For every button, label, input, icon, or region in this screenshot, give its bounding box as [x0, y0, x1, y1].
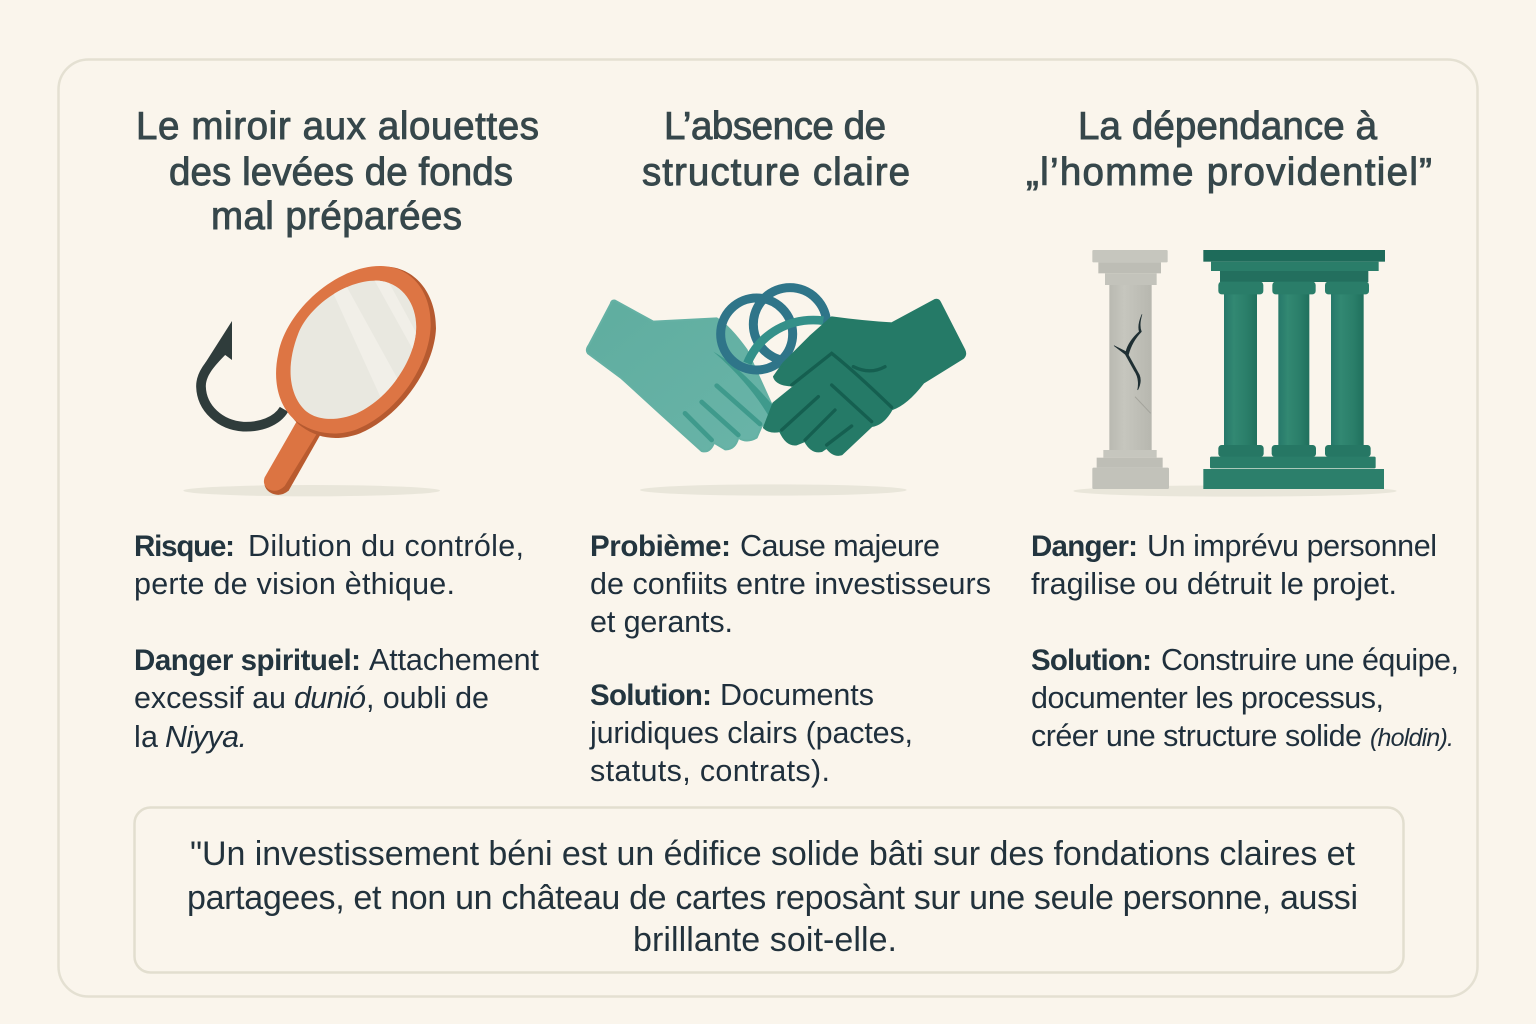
panel: absence de structure: [587, 105, 991, 788]
heading: miroir aux alouettes: [136, 105, 539, 238]
heading: miroir aux alouettes: mal préparées: [211, 195, 462, 238]
text: solution equipe: [1031, 643, 1459, 753]
text: danger spirituel: Attachement: [369, 643, 540, 677]
text: probleme: Probième:: [590, 530, 731, 563]
callout: quote: [134, 808, 1404, 972]
callout: quote: "Un investissement béni est un édifice solide bâti sur des fondations claires et: [190, 835, 1356, 873]
text: danger spirituel: Niyya.: [165, 720, 247, 754]
heading: absence de structure: structure claire: [642, 151, 910, 194]
text: danger spirituel: Danger spirituel:: [134, 644, 361, 677]
icon: cracked column and green temple: [1073, 250, 1397, 497]
text: solution documents: statuts, contrats).: [590, 754, 830, 788]
text: risque: Dilution du contróle,: [248, 529, 524, 563]
text: risque: [134, 529, 524, 601]
text: risque: perte de vision èthique.: [134, 567, 455, 601]
heading: homme providentiel: [1026, 105, 1432, 194]
heading: absence de structure: L’absence de: [664, 105, 886, 148]
text: danger spirituel: , oubli de: [366, 681, 489, 715]
green temple: [1203, 250, 1385, 489]
callout: quote: brilllante soit-elle.: [633, 921, 897, 959]
text: solution equipe: Solution:: [1031, 644, 1152, 677]
heading: absence de structure: [642, 105, 910, 194]
text: danger: [1031, 529, 1437, 601]
text: risque: Risque:: [134, 530, 235, 563]
heading: homme providentiel: La dépendance à: [1078, 105, 1378, 148]
text: solution documents: Documents: [720, 678, 874, 712]
text: solution documents: Solution:: [590, 679, 712, 712]
callout: quote: partagees, et non un château de cartes reposànt sur une seule personne, aussi: [187, 879, 1358, 917]
text: solution documents: juridiques clairs (pactes,: [589, 716, 913, 750]
text: solution equipe: Construire une équipe,: [1161, 643, 1459, 677]
text: danger spirituel: excessif au: [134, 681, 286, 715]
text: danger: fragilise ou détruit le projet.: [1031, 567, 1397, 601]
heading: miroir aux alouettes: des levées de fonds: [169, 151, 513, 194]
text: danger: Un imprévu personnel: [1147, 529, 1437, 563]
text: probleme: et gerants.: [590, 605, 733, 639]
text: danger spirituel: la: [134, 720, 158, 754]
text: danger: Danger:: [1031, 530, 1138, 563]
text: danger spirituel: dunió: [294, 681, 366, 715]
icon: mirror with hook: [183, 266, 440, 496]
text: solution documents: [589, 678, 913, 788]
text: probleme: Cause majeure: [740, 529, 940, 563]
text: solution equipe: créer une structure solide: [1031, 719, 1362, 753]
panel: miroir aux alouettes: [134, 105, 540, 754]
text: probleme: de confiits entre investisseurs: [590, 567, 991, 601]
heading: miroir aux alouettes: Le miroir aux alouettes: [136, 105, 539, 148]
text: solution equipe: documenter les processus,: [1031, 681, 1384, 715]
heading: homme providentiel: „l’homme providentiel”: [1026, 151, 1432, 194]
text: danger spirituel: [134, 643, 540, 754]
panel: homme providentiel: [1026, 105, 1459, 753]
cracked grey column: [1092, 250, 1169, 489]
icon: handshake with rings: [587, 288, 965, 496]
text: solution equipe: (holdin).: [1370, 724, 1454, 752]
text: probleme: [590, 529, 991, 639]
